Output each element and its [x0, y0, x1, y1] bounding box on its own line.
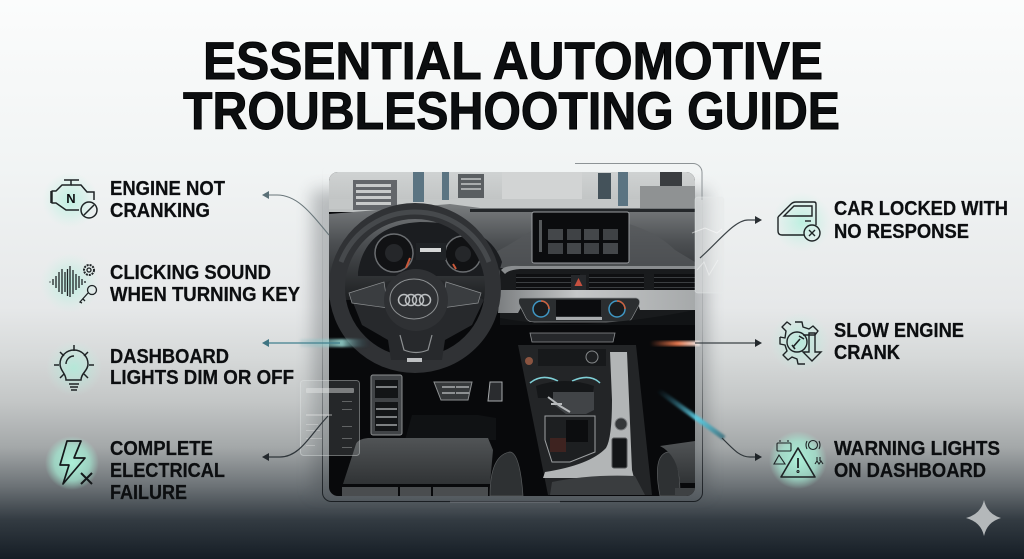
glass panel: data right [692, 197, 724, 293]
arrow: car locked [700, 216, 762, 258]
title: ESSENTIAL AUTOMOTIVE [203, 32, 823, 91]
center console [518, 345, 652, 495]
icon: sparkle watermark [966, 500, 1001, 536]
icon: gear with wrench and arrow [770, 312, 830, 372]
arrow: dashboard lights [262, 339, 370, 347]
label: clicking sound: CLICKING SOUND [110, 262, 271, 284]
title: TROUBLESHOOTING GUIDE [183, 82, 840, 141]
icon: warning lights [769, 431, 827, 489]
icon: lightning with X [45, 436, 99, 490]
icon: light bulb [46, 340, 102, 396]
icon: car door locked [772, 192, 832, 252]
label: warning lights: ON DASHBOARD [834, 460, 986, 482]
label: engine not cranking: CRANKING [110, 200, 210, 222]
label: engine not cranking [110, 178, 225, 222]
arrow: slow engine crank [650, 339, 762, 347]
icon: engine [42, 172, 98, 228]
label: complete electrical failure [110, 438, 225, 504]
infotainment screen [532, 212, 629, 263]
lower dash [500, 268, 695, 322]
label: dashboard lights [110, 346, 294, 389]
label: dashboard lights: LIGHTS DIM OR OFF [110, 367, 294, 389]
label: car locked: NO RESPONSE [834, 221, 969, 243]
label: slow engine crank: CRANK [834, 342, 901, 364]
arrow: engine not cranking [262, 191, 329, 235]
icon: sound wave and key [40, 253, 100, 313]
glass panel: diagnostics left [300, 380, 360, 456]
seats [342, 438, 695, 496]
icon: engine: N [66, 191, 76, 206]
label: car locked: CAR LOCKED WITH [834, 198, 1008, 220]
pedals [371, 375, 502, 440]
photo: car interior [312, 164, 708, 502]
label: complete electrical failure: COMPLETE [110, 438, 213, 460]
label: slow engine crank: SLOW ENGINE [834, 320, 964, 342]
label: slow engine crank [834, 320, 964, 364]
arrow: warning lights [658, 390, 762, 461]
arrow: complete electrical failure [262, 416, 328, 461]
label: clicking sound [110, 262, 301, 306]
label: clicking sound: WHEN TURNING KEY [110, 284, 301, 306]
label: complete electrical failure: FAILURE [110, 482, 187, 504]
label: car locked [834, 198, 1008, 243]
label: engine not cranking: ENGINE NOT [110, 178, 225, 200]
label: warning lights: WARNING LIGHTS [834, 438, 1000, 460]
label: warning lights [834, 438, 1000, 482]
title [183, 32, 840, 141]
label: complete electrical failure: ELECTRICAL [110, 460, 225, 482]
steering wheel [337, 211, 493, 365]
instrument cluster [358, 222, 502, 276]
label: dashboard lights: DASHBOARD [110, 346, 229, 368]
